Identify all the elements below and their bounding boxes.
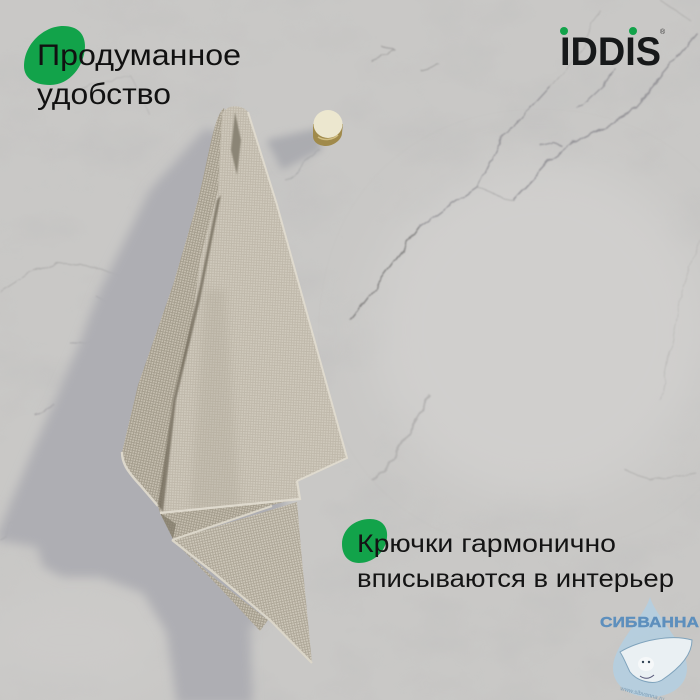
brass wall hook [313, 110, 343, 146]
water drop [613, 597, 687, 697]
towel left back flap [122, 108, 232, 513]
heading: удобство [37, 78, 171, 111]
towel front panel [160, 106, 347, 513]
towel shadow on the wall [0, 128, 322, 700]
caption: вписываются в интерьер [357, 565, 674, 593]
caption: Крючки гармонично [357, 530, 616, 558]
bathtub [620, 638, 692, 682]
towel [122, 106, 347, 663]
IDDIS logo: ® [660, 28, 666, 36]
watermark: Sibvanna logo [600, 597, 699, 700]
tub face [638, 657, 654, 678]
heading: Продуманное [37, 39, 241, 72]
towel middle fold [160, 498, 300, 539]
green accent blob, bottom [342, 519, 387, 563]
towel fold shade [158, 195, 221, 512]
IDDIS logo: IDDIS [560, 30, 661, 74]
brand name: СИБВАННА [600, 614, 699, 631]
towel back layer of lower corner [176, 543, 268, 631]
towel lower corner [172, 502, 312, 663]
green accent blob, top [24, 26, 85, 85]
towel hem [248, 112, 347, 481]
